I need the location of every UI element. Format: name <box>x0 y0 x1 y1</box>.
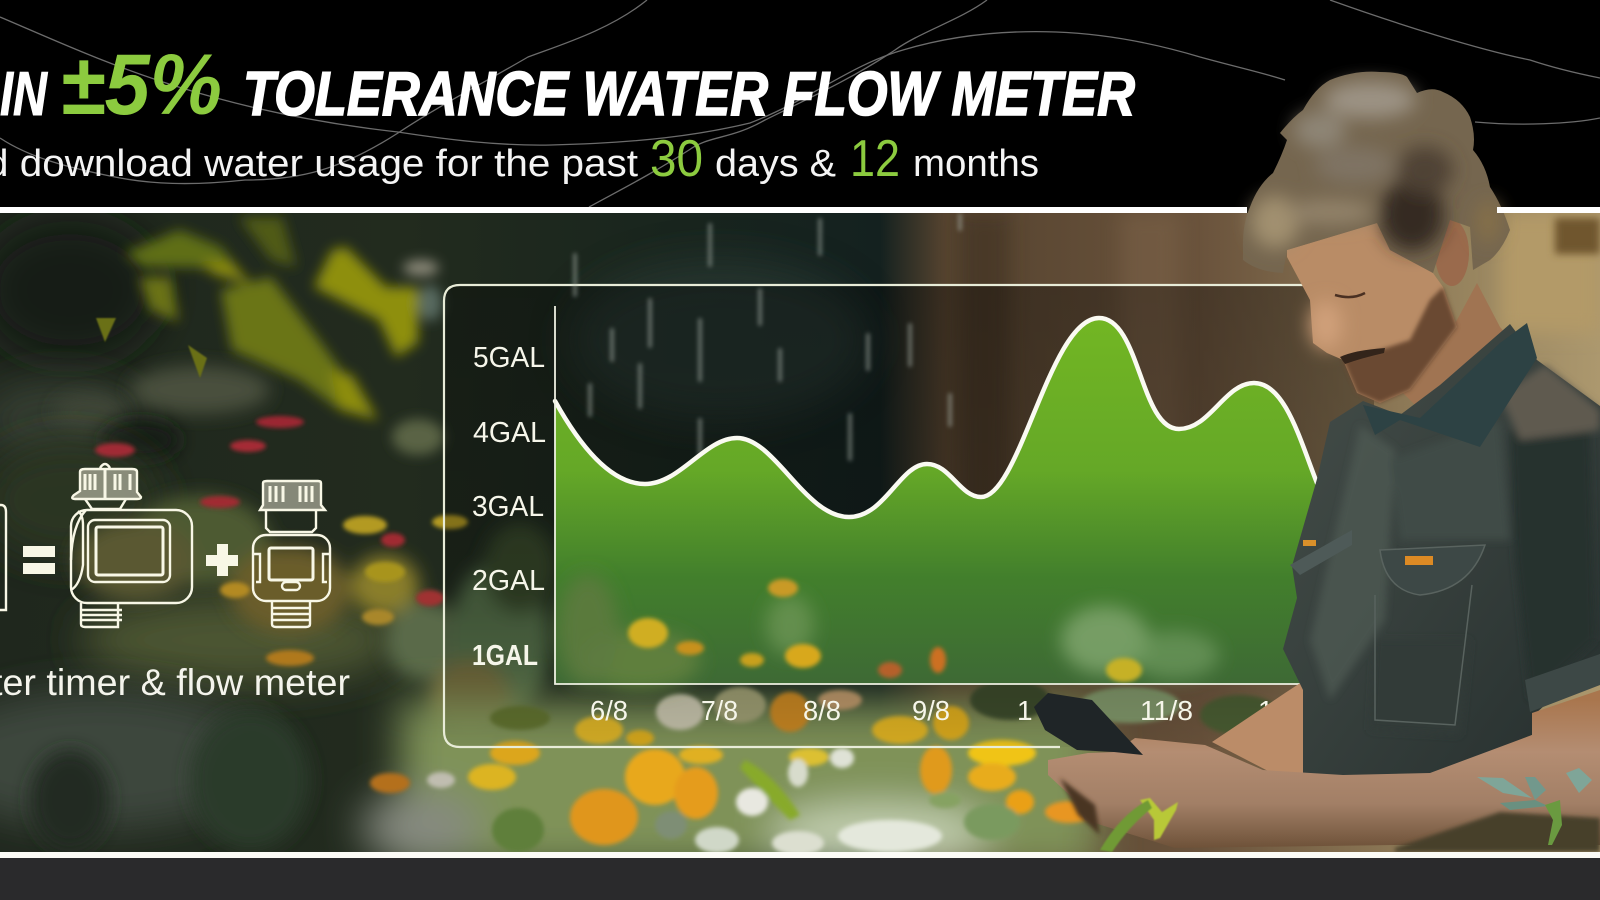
y axis labels: 4GAL <box>473 417 546 449</box>
x axis labels: 6/8 <box>590 695 628 726</box>
footer band <box>0 858 1600 900</box>
highlight: tolerance figure: ±5% <box>60 37 222 133</box>
subtitle: d download water usage for the past <box>0 143 638 185</box>
man: nose highlight <box>1310 301 1342 349</box>
chart frame <box>444 285 1310 747</box>
man: beard <box>1343 287 1457 403</box>
x axis labels <box>590 695 1274 726</box>
area fill <box>555 318 1317 684</box>
man: neck <box>1403 283 1515 420</box>
title remainder: TOLERANCE WATER FLOW METER <box>243 60 1135 129</box>
flowers through the area fill <box>558 574 1219 690</box>
man: face <box>1287 223 1457 403</box>
man: shirt shading <box>1310 365 1600 735</box>
man: ear <box>1435 220 1469 286</box>
fence and background right <box>570 213 1600 513</box>
man: far arm behind phone <box>1212 670 1320 775</box>
x axis labels: 1 <box>1017 695 1033 726</box>
subtitle: days & <box>715 143 836 185</box>
heading: main title: IN <box>0 60 48 129</box>
man: moustache and eye <box>1335 293 1385 364</box>
plant by the hand <box>1100 798 1178 852</box>
divider: top white line right of the head <box>1497 207 1600 213</box>
man: sleeve cuff <box>1525 654 1600 712</box>
subtitle: 30 <box>650 130 703 188</box>
axes <box>555 306 1300 684</box>
x axis labels: 1 <box>1258 695 1274 726</box>
subtitle <box>0 130 1039 188</box>
man: palm shadow <box>1060 778 1100 835</box>
rain streaks <box>575 215 960 615</box>
divider: top white line <box>0 207 1247 213</box>
man: phone <box>1034 693 1143 755</box>
decorative wave lines <box>0 0 1600 207</box>
y axis labels <box>472 342 546 672</box>
x axis labels: 11/8 <box>1140 695 1193 726</box>
flower bed: midfield <box>75 416 556 740</box>
man: collar <box>1363 323 1537 447</box>
subtitle: 12 <box>850 130 900 188</box>
y axis labels: 2GAL <box>472 565 545 597</box>
man: chest pockets <box>1290 530 1485 725</box>
heading: main title <box>0 37 1135 133</box>
x axis labels: 9/8 <box>912 695 950 726</box>
man: arm underside shade <box>1395 812 1600 852</box>
icon: equals sign <box>23 546 55 574</box>
x axis labels: 7/8 <box>701 695 738 726</box>
man: shirt <box>1283 324 1600 775</box>
x axis labels: 8/8 <box>803 695 841 726</box>
divider: bottom white line <box>0 852 1600 858</box>
icon group: timer equals parts <box>0 464 330 627</box>
line chart <box>444 215 1317 747</box>
foliage: upper left <box>0 217 444 850</box>
small leaf tips <box>96 318 207 378</box>
icon: plus sign <box>206 544 238 576</box>
header band <box>0 0 1600 208</box>
frame interior shade <box>444 285 1374 747</box>
subtitle: months <box>913 143 1039 185</box>
icon: water timer <box>71 464 192 627</box>
man: hair <box>1243 72 1510 273</box>
flower bed: foreground <box>361 680 1280 870</box>
y axis labels: 3GAL <box>472 491 544 523</box>
foreground leaves <box>1477 768 1592 845</box>
photo: man checking phone <box>1034 72 1600 852</box>
y axis labels: 1GAL <box>472 640 538 672</box>
icon: cropped combined device <box>0 505 6 610</box>
panel: garden photo background <box>0 213 1600 870</box>
y axis labels: 5GAL <box>473 342 545 374</box>
curve line <box>555 318 1317 517</box>
icon: flow meter <box>253 481 330 627</box>
man: forearm and hand <box>1048 690 1600 848</box>
caption: device parts: ter timer & flow meter <box>0 662 350 703</box>
